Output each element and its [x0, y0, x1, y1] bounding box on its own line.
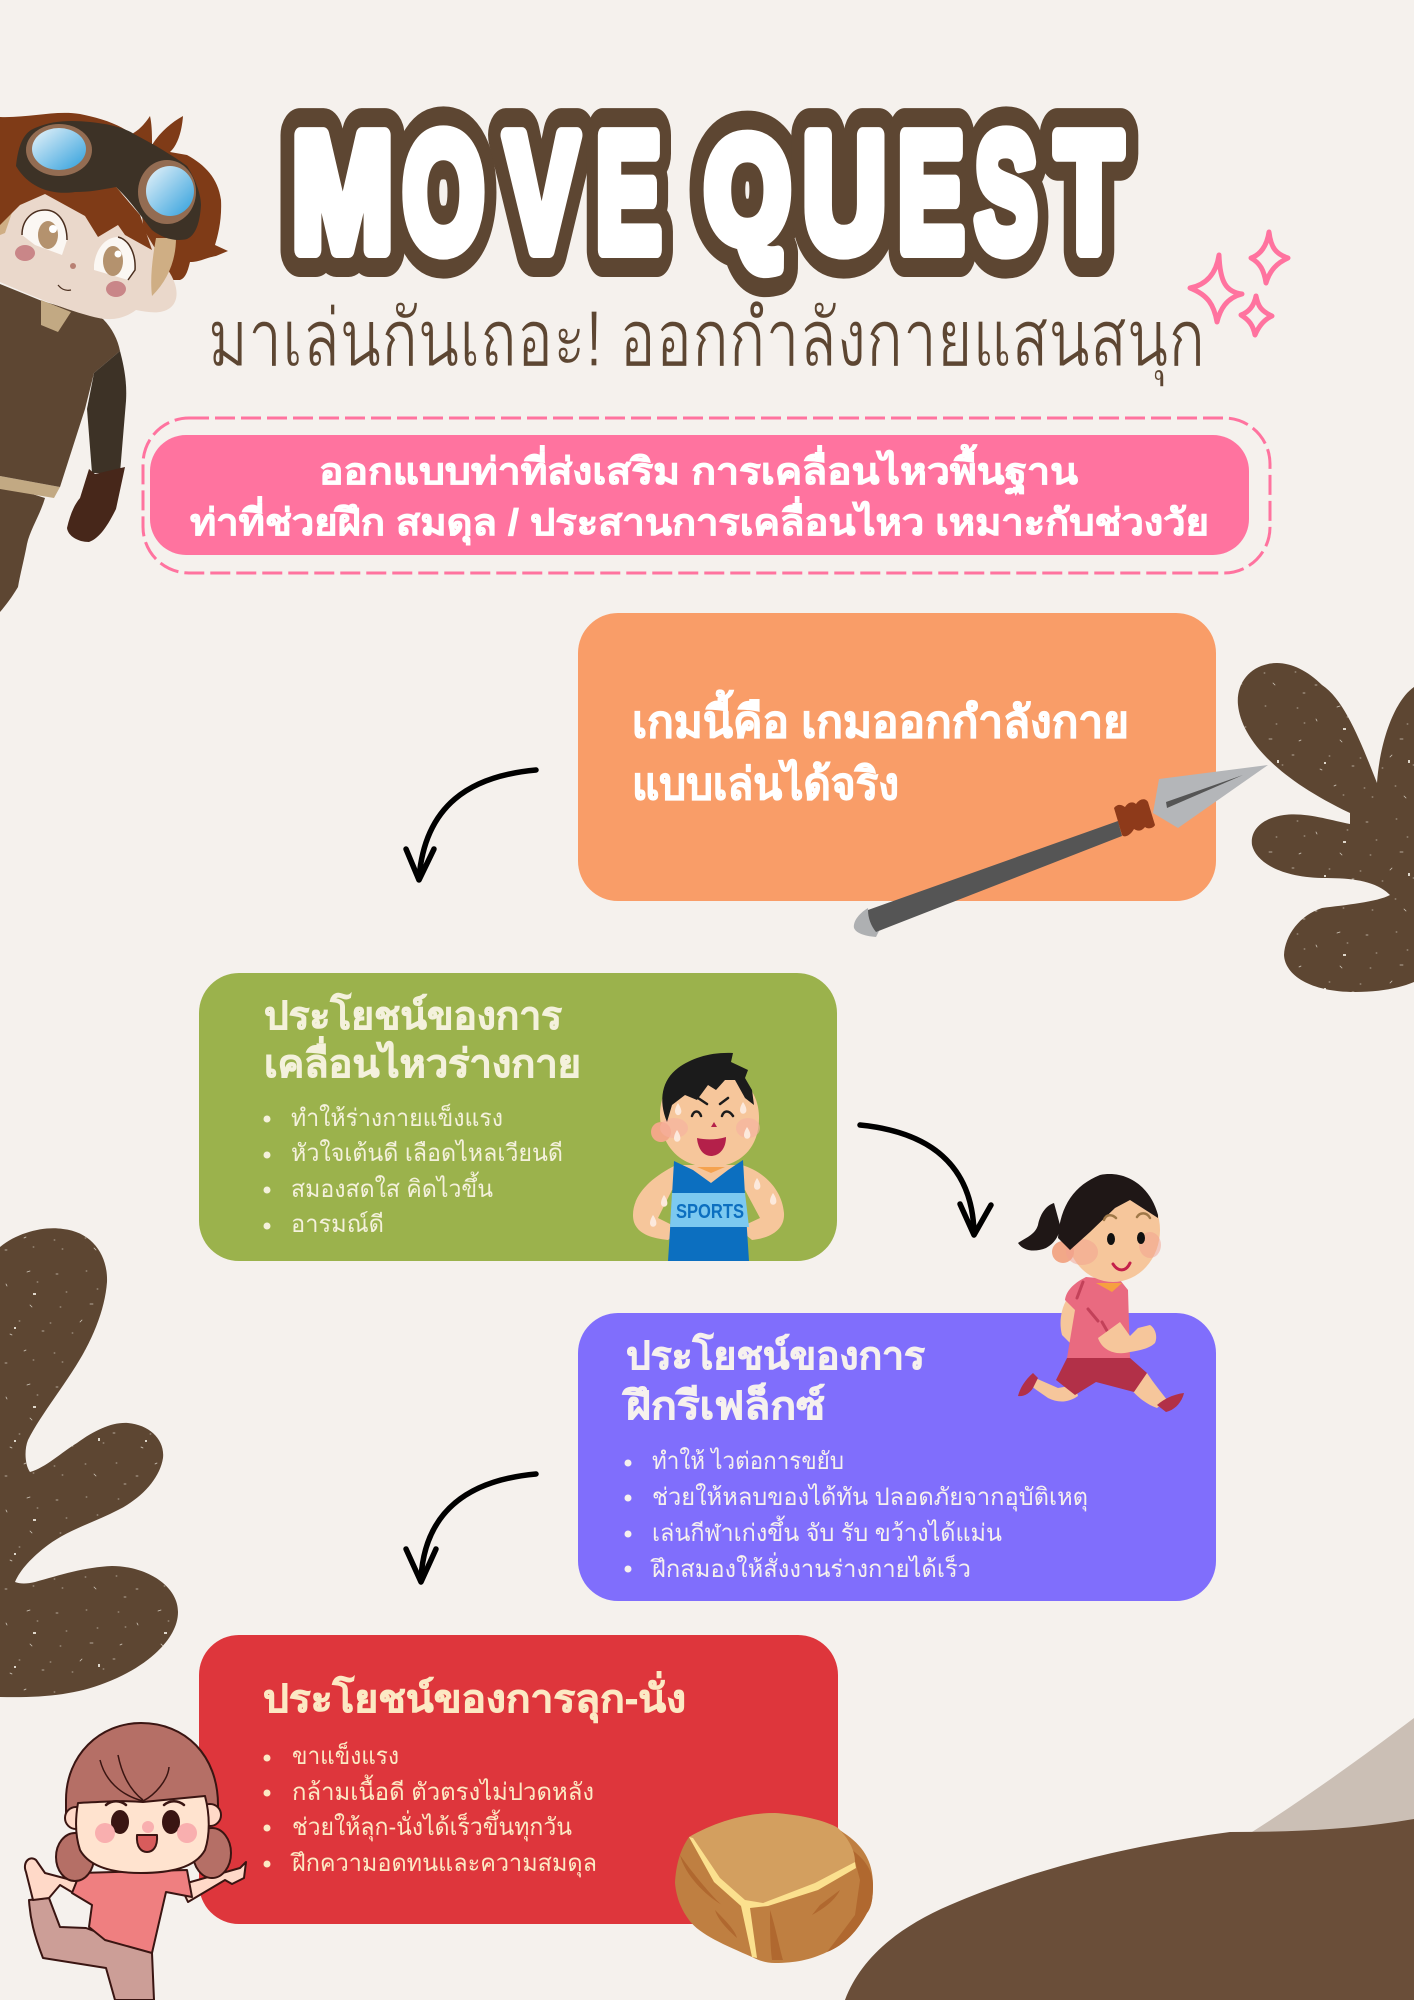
bullet list: body movement	[264, 1103, 563, 1238]
heading: body movement: เคลื่อนไหวร่างกาย	[264, 1036, 581, 1086]
background hill: tan	[1252, 1718, 1414, 1850]
callout: dashed pink banner: ท่าที่ช่วยฝึก สมดุล / ประสานการเคลื่อนไหว เหมาะกับช่วงวัย	[190, 496, 1209, 546]
panel: orange game intro: เกมนี้คือ เกมออกกำลังกาย	[632, 689, 1129, 747]
title: MOVE QUEST: E	[596, 100, 661, 286]
heading: reflex: ฝึกรีเฟล็กซ์	[621, 1382, 825, 1428]
character: girl in balance pose	[25, 1723, 246, 2000]
title: MOVE QUEST: M	[292, 100, 393, 286]
character: sporty boy	[633, 1053, 784, 1261]
background blob: top right leaf	[1238, 663, 1414, 992]
icon: spear	[854, 765, 1268, 937]
character: boy with goggles	[0, 113, 228, 612]
bullet list: body movement: หัวใจเต้นดี เลือดไหลเวียนดี	[291, 1139, 563, 1167]
title: MOVE QUEST	[292, 100, 1122, 286]
bullet list: sit-stand: กล้ามเนื้อดี ตัวตรงไม่ปวดหลัง	[292, 1774, 594, 1806]
title: MOVE QUEST: Q	[705, 108, 790, 273]
title: MOVE QUEST: E	[898, 100, 964, 286]
title: MOVE QUEST: V	[505, 100, 578, 286]
heading: body movement: ประโยชน์ของการ	[264, 993, 562, 1038]
title: MOVE QUEST: O	[403, 100, 484, 286]
title: MOVE QUEST: Q	[705, 108, 790, 273]
bullet list: sit-stand	[264, 1741, 597, 1878]
character: running girl	[1018, 1174, 1184, 1412]
title: MOVE QUEST: E	[898, 100, 964, 286]
bullet list: body movement: สมองสดใส คิดไวขึ้น	[291, 1171, 493, 1203]
title: MOVE QUEST: U	[803, 100, 886, 286]
title: MOVE QUEST: T	[1056, 100, 1122, 286]
bullet list: reflex: ฝึกสมองให้สั่งงานร่างกายได้เร็ว	[650, 1552, 971, 1583]
bullet list: reflex: ช่วยให้หลบของได้ทัน ปลอดภัยจากอุบัติเหตุ	[652, 1483, 1088, 1512]
bullet list: sit-stand: ขาแข็งแรง	[292, 1741, 399, 1770]
title: MOVE QUEST: U	[803, 100, 886, 286]
panel: purple reflex benefits	[578, 1313, 1216, 1601]
heading: reflex: ประโยชน์ของการ	[626, 1333, 925, 1378]
title: MOVE QUEST: V	[505, 100, 578, 286]
bullet list: reflex: เล่นกีฬาเก่งขึ้น จับ รับ ขว้างได้แม่น	[652, 1515, 1002, 1547]
callout: dashed pink banner: ออกแบบท่าที่ส่งเสริม การเคลื่อนไหวพื้นฐาน	[319, 444, 1078, 495]
bullet list: body movement: อารมณ์ดี	[291, 1210, 384, 1238]
panel: orange game intro: แบบเล่นได้จริง	[632, 758, 899, 809]
title: MOVE QUEST: S	[975, 100, 1037, 286]
background blob: left leaf	[0, 1228, 178, 1697]
bullet list: body movement: ทำให้ร่างกายแข็งแรง	[291, 1103, 503, 1132]
bullet list: reflex	[624, 1447, 1088, 1583]
title: MOVE QUEST: O	[403, 100, 484, 286]
background hill: brown	[845, 1819, 1414, 2000]
arrow: green to purple	[860, 1125, 991, 1235]
arrow: purple to red	[406, 1474, 536, 1582]
heading: reflex	[621, 1333, 925, 1428]
title: MOVE QUEST: S	[975, 100, 1037, 286]
panel: green body movement benefits	[199, 973, 837, 1261]
character: sporty boy: SPORTS	[676, 1201, 744, 1223]
icon: pink sparkles	[1190, 232, 1288, 335]
panel: red sit-stand benefits	[199, 1635, 838, 1924]
heading: sit-stand: ประโยชน์ของการลุก-นั่ง	[263, 1671, 686, 1723]
bullet list: reflex: ทำให้ ไวต่อการขยับ	[652, 1447, 844, 1475]
heading: body movement	[264, 993, 581, 1086]
title: MOVE QUEST: M	[292, 100, 393, 286]
panel: orange game intro	[578, 613, 1216, 901]
title: MOVE QUEST: E	[596, 100, 661, 286]
title: MOVE QUEST: T	[1056, 100, 1122, 286]
arrow: orange to green	[406, 770, 536, 880]
bullet list: sit-stand: ฝึกความอดทนและความสมดุล	[290, 1850, 597, 1878]
bullet list: sit-stand: ช่วยให้ลุก-นั่งได้เร็วขึ้นทุกวัน	[292, 1809, 572, 1842]
callout: dashed pink banner	[143, 418, 1270, 573]
icon: bread	[675, 1813, 873, 1963]
